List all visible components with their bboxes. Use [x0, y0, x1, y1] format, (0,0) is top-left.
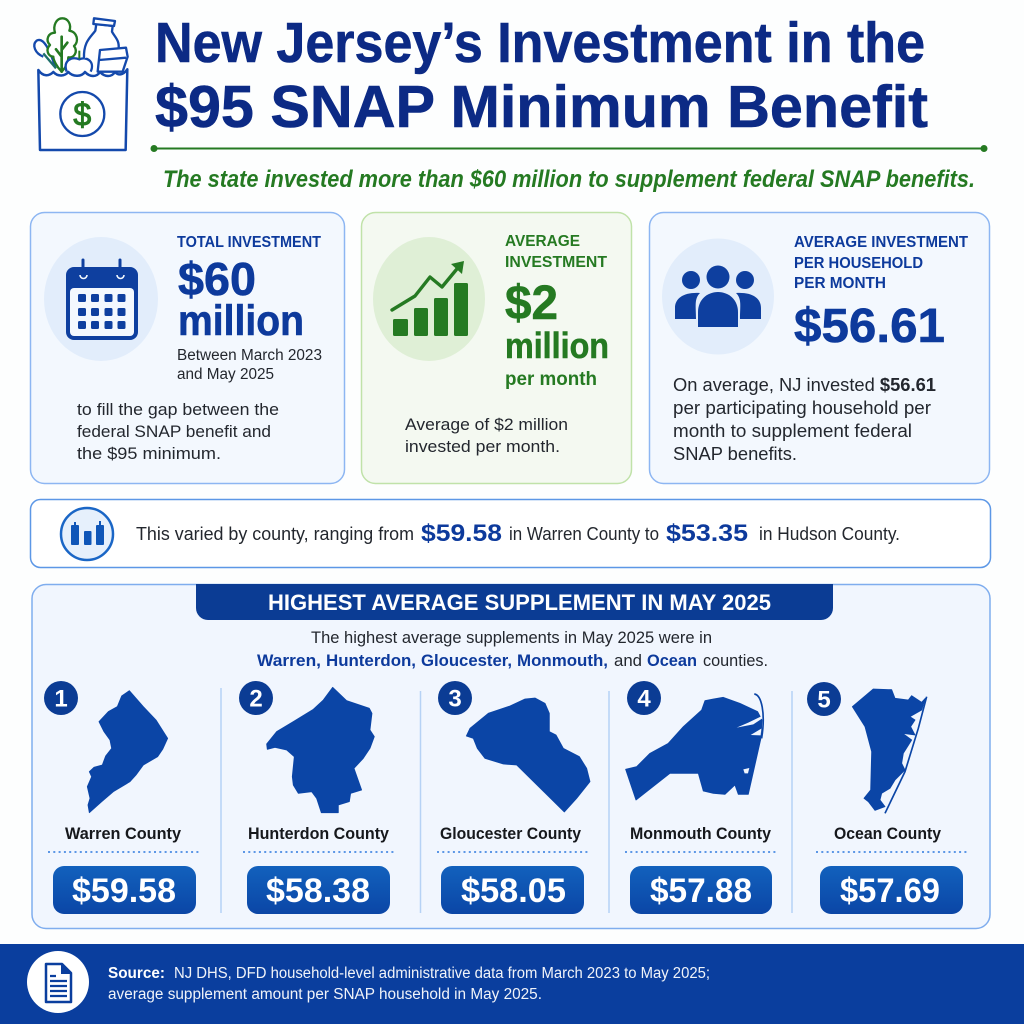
- rank badge 1: [44, 681, 78, 715]
- rank badge 5: [807, 682, 841, 716]
- text: county range sentence: [136, 520, 900, 547]
- county 5: Ocean: [807, 682, 968, 914]
- title: New Jersey’s Investment in the: [155, 11, 925, 75]
- heading: per household per month: AVERAGE INVESTMENT: [794, 234, 968, 251]
- text: monthly average description: invested per month.: [405, 437, 560, 456]
- text: source citation: average supplement amount per SNAP household in May 2025.: [108, 986, 542, 1003]
- heading banner: [196, 584, 833, 620]
- rank badge 5: 5: [817, 686, 831, 714]
- text: intro sentence: [257, 628, 768, 670]
- text: intro sentence: Monmouth,: [517, 651, 608, 670]
- label: Monmouth County: Monmouth County: [630, 824, 772, 843]
- text: intro sentence: The highest average supplements in May 2025 were in: [311, 628, 712, 647]
- text: source citation: [108, 965, 710, 1003]
- label: Hunterdon County: Hunterdon County: [248, 824, 390, 843]
- text: intro sentence: Hunterdon,: [326, 651, 416, 670]
- text: household description: On average, NJ invested $56.61: [673, 375, 936, 395]
- text: date range: Between March 2023: [177, 347, 322, 364]
- label: Ocean County: Ocean County: [834, 824, 941, 843]
- text: intro sentence: counties.: [703, 651, 768, 670]
- text: county range sentence: $59.58: [421, 520, 502, 547]
- text: date range: [177, 347, 322, 383]
- title: $95 SNAP Minimum Benefit: [155, 74, 928, 140]
- county 3: Gloucester: [437, 681, 590, 914]
- rank badge 1: 1: [54, 686, 68, 712]
- callout: county range: [30, 500, 990, 568]
- rank badge 2: [239, 681, 273, 715]
- stat: $60 million: [178, 253, 304, 345]
- text: county range sentence: This varied by county, ranging from: [136, 524, 414, 544]
- stat: $2 million per month: million: [505, 325, 609, 366]
- text: source citation: NJ DHS, DFD household-level administrative data from March 2023 to May 2025;: [174, 965, 710, 982]
- county 1: Warren: [44, 681, 201, 914]
- value: $57.88: [630, 866, 772, 914]
- text: household description: SNAP benefits.: [673, 444, 797, 464]
- value: $57.69: $57.69: [840, 872, 940, 910]
- rank badge 3: [438, 681, 472, 715]
- value: $58.05: $58.05: [461, 872, 566, 910]
- icon: mini bar chart: [61, 508, 113, 560]
- text: gap description: federal SNAP benefit and: [77, 422, 271, 441]
- text: county range sentence: in Warren County to: [509, 524, 659, 544]
- text: intro sentence: and: [614, 651, 642, 670]
- rank badge 2: 2: [249, 686, 263, 712]
- county 2: Hunterdon: [239, 681, 395, 914]
- stat: $60 million: $60: [178, 253, 256, 305]
- stat: $2 million per month: [505, 277, 609, 390]
- text: household description: per participating household per: [673, 398, 931, 418]
- footer: source: [0, 944, 1024, 1024]
- text: intro sentence: Warren,: [257, 651, 321, 670]
- icon: document: [27, 951, 89, 1013]
- map: Hunterdon County: [267, 687, 374, 813]
- text: gap description: the $95 minimum.: [77, 444, 221, 463]
- heading: average investment: [505, 233, 607, 271]
- text: household description: [673, 375, 936, 464]
- heading: total investment: TOTAL INVESTMENT: [177, 234, 321, 251]
- title: [155, 11, 928, 140]
- panel: highest average supplement: [32, 584, 990, 928]
- value: $58.38: $58.38: [266, 872, 370, 910]
- text: monthly average description: [405, 415, 568, 456]
- text: monthly average description: Average of $2 million: [405, 415, 568, 434]
- icon: rising bar chart: [373, 237, 485, 361]
- text: intro sentence: Ocean: [647, 651, 697, 670]
- value: $57.69: [820, 866, 963, 914]
- text: county range sentence: in Hudson County.: [759, 524, 900, 544]
- map: Monmouth County: [626, 694, 763, 800]
- rank badge 4: 4: [637, 686, 651, 712]
- icon: grocery bag: [34, 18, 128, 150]
- heading banner: HIGHEST AVERAGE SUPPLEMENT IN MAY 2025: [268, 590, 771, 615]
- text: gap description: to fill the gap between the: [77, 400, 279, 419]
- text: source citation: Source:: [108, 965, 165, 982]
- panel: average per household: [650, 212, 990, 484]
- heading: per household per month: PER MONTH: [794, 275, 886, 292]
- map: Ocean County: [852, 689, 927, 813]
- text: gap description: [77, 400, 279, 463]
- icon: grocery bag: $: [73, 96, 91, 132]
- county 4: Monmouth: [625, 681, 777, 914]
- value: $59.58: [53, 866, 196, 914]
- heading: average investment: AVERAGE: [505, 233, 580, 250]
- text: intro sentence: Gloucester,: [421, 651, 512, 670]
- stat: $60 million: million: [178, 297, 304, 345]
- icon: calendar: [44, 237, 158, 361]
- text: county range sentence: $53.35: [666, 520, 748, 547]
- rank badge 4: [627, 681, 661, 715]
- value: $57.88: $57.88: [650, 872, 752, 910]
- panel: total investment: [30, 212, 344, 484]
- value: $59.58: $59.58: [72, 872, 176, 910]
- text: date range: and May 2025: [177, 366, 274, 383]
- stat: $56.61: $56.61: [794, 300, 945, 353]
- value: $58.05: [441, 866, 584, 914]
- map: Warren County: [87, 691, 168, 813]
- stat: $2 million per month: $2: [505, 277, 558, 330]
- heading: per household per month: PER HOUSEHOLD: [794, 255, 923, 272]
- label: Gloucester County: Gloucester County: [440, 824, 581, 843]
- heading: average investment: INVESTMENT: [505, 254, 607, 271]
- stat: $2 million per month: per month: [505, 369, 597, 390]
- icon: people group: [662, 238, 774, 354]
- value: $58.38: [247, 866, 390, 914]
- heading: per household per month: [794, 234, 968, 292]
- panel: average investment: [362, 212, 632, 484]
- label: Warren County: Warren County: [65, 824, 182, 843]
- text: household description: month to supplement federal: [673, 421, 912, 441]
- map: Gloucester County: [466, 698, 590, 812]
- rank badge 3: 3: [448, 686, 462, 712]
